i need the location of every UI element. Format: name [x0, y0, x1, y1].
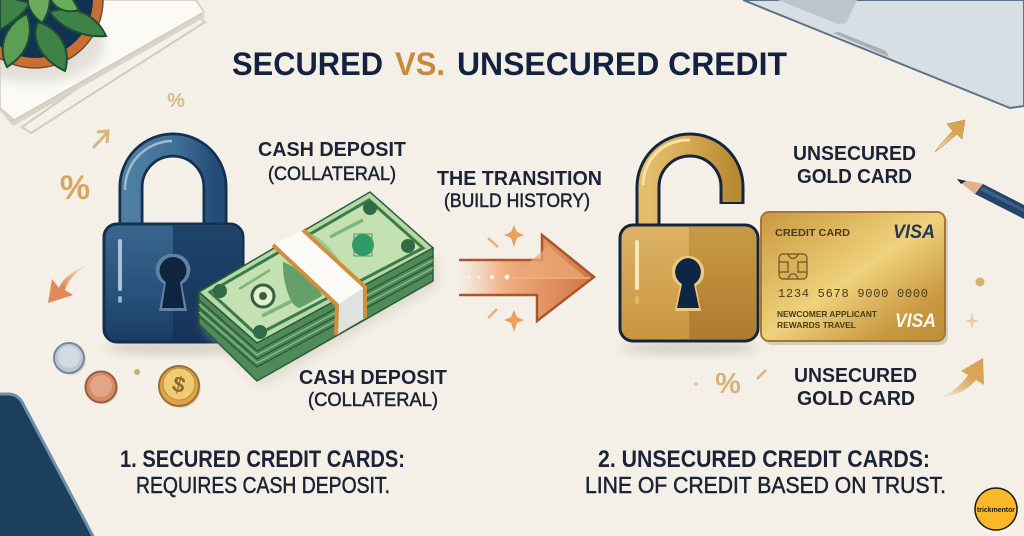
paper band	[273, 230, 365, 335]
gold credit card: REWARDS TRAVEL	[777, 320, 856, 330]
caption: secured credit cards: 1. SECURED CREDIT CARDS:	[120, 446, 405, 473]
gold credit card	[761, 212, 948, 345]
coins	[54, 343, 201, 408]
label: unsecured gold card (bottom): GOLD CARD	[797, 388, 915, 410]
label: unsecured gold card (bottom): UNSECURED	[794, 365, 917, 387]
decoration: orange arrow	[48, 265, 88, 303]
keyhole	[156, 254, 190, 311]
caption: secured credit cards	[120, 446, 405, 498]
label: cash deposit (top): (COLLATERAL)	[268, 164, 396, 185]
title: VS.	[395, 46, 445, 82]
gold credit card: CREDIT CARD	[775, 227, 850, 239]
potted plant	[0, 0, 106, 83]
decoration: gold arrow bottom	[940, 358, 984, 397]
label: cash deposit (top): CASH DEPOSIT	[258, 139, 406, 161]
caption: unsecured credit cards: LINE OF CREDIT BASED ON TRUST.	[585, 472, 946, 498]
label: cash deposit (top)	[258, 139, 406, 185]
cash stack	[199, 192, 438, 387]
lock body	[620, 225, 758, 341]
label: the transition	[437, 168, 602, 212]
stack of paper	[0, 0, 205, 133]
pencil	[957, 179, 1024, 219]
decoration: percent and dash	[694, 368, 766, 400]
label: unsecured gold card (bottom)	[794, 365, 917, 410]
gold credit card: NEWCOMER APPLICANT	[777, 309, 878, 319]
tablet	[0, 394, 95, 536]
decoration: small arrow	[93, 131, 108, 148]
logo badge	[975, 488, 1017, 530]
title: UNSECURED CREDIT	[457, 46, 787, 82]
lock body	[104, 224, 243, 342]
decoration: small percent sign: %	[167, 90, 185, 112]
stack sides	[199, 248, 433, 381]
keyhole	[672, 256, 704, 311]
title	[232, 46, 787, 82]
decoration: dot and sparkle	[964, 278, 984, 330]
label: unsecured gold card (top)	[793, 143, 916, 188]
gold credit card: 1234 5678 9000 0000	[778, 287, 928, 301]
transition arrow	[459, 225, 594, 332]
label: cash deposit (bottom)	[299, 367, 447, 411]
label: unsecured gold card (top): GOLD CARD	[797, 166, 912, 188]
label: cash deposit (bottom): CASH DEPOSIT	[299, 367, 447, 389]
chip	[779, 254, 807, 279]
shackle	[131, 145, 215, 226]
decoration: gold arrow top	[935, 120, 965, 152]
secured padlock	[104, 141, 245, 355]
label: unsecured gold card (top): UNSECURED	[793, 143, 916, 165]
gold credit card: VISA	[893, 222, 935, 243]
coins: $	[170, 371, 188, 398]
open shackle	[648, 145, 732, 226]
unsecured padlock	[620, 140, 760, 355]
title: SECURED	[232, 46, 383, 82]
caption: secured credit cards: REQUIRES CASH DEPOSIT.	[136, 472, 390, 498]
decoration: large percent sign: %	[60, 169, 90, 207]
caption: unsecured credit cards	[585, 446, 946, 498]
label: the transition: THE TRANSITION	[437, 168, 602, 190]
decoration: percent and dash: %	[715, 368, 741, 400]
label: cash deposit (bottom): (COLLATERAL)	[308, 390, 438, 411]
gold credit card: VISA	[895, 311, 936, 332]
laptop	[743, 0, 1024, 108]
label: the transition: (BUILD HISTORY)	[444, 191, 590, 212]
sparkles	[504, 225, 524, 247]
logo badge: trickmentor	[977, 505, 1015, 514]
caption: unsecured credit cards: 2. UNSECURED CREDIT CARDS:	[598, 446, 930, 473]
top bill	[199, 192, 433, 343]
